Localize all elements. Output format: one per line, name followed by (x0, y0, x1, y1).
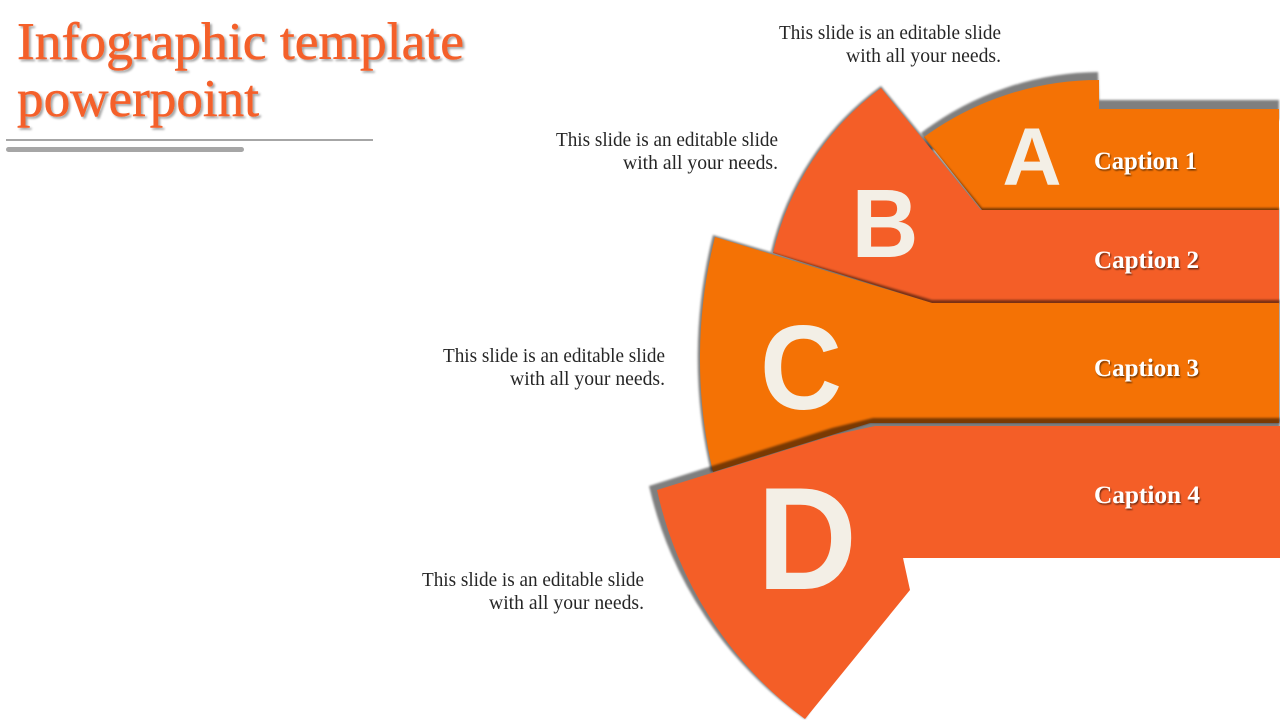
letter C: C (760, 301, 842, 435)
title (17, 13, 464, 128)
title underline rules (6, 139, 373, 152)
panel: segment D (649, 418, 1280, 719)
text block: A description: This slide is an editable slide (779, 22, 1001, 44)
letter B: B (852, 169, 918, 278)
text block: A description: with all your needs. (846, 45, 1001, 67)
letter D: D (757, 457, 857, 620)
panel: segment A (921, 72, 1279, 210)
text block: C description: with all your needs. (510, 368, 665, 390)
panel: segment C (698, 235, 1280, 472)
letter A: A (1002, 112, 1062, 203)
text block: D description (422, 569, 644, 614)
text block: D description: with all your needs. (489, 592, 644, 614)
text block: A description (779, 22, 1001, 67)
text block: B description (556, 129, 778, 174)
caption 3: Caption 3 (1094, 355, 1199, 382)
caption 2: Caption 2 (1094, 247, 1199, 274)
caption 4: Caption 4 (1094, 482, 1200, 509)
text block: B description: with all your needs. (623, 152, 778, 174)
panel: segment B (771, 86, 1279, 303)
title: powerpoint (17, 70, 259, 128)
text block: B description: This slide is an editable slide (556, 129, 778, 151)
text block: D description: This slide is an editable slide (422, 569, 644, 591)
title: Infographic template (17, 13, 464, 71)
caption 1: Caption 1 (1094, 148, 1197, 175)
text block: C description (443, 345, 665, 390)
text block: C description: This slide is an editable slide (443, 345, 665, 367)
